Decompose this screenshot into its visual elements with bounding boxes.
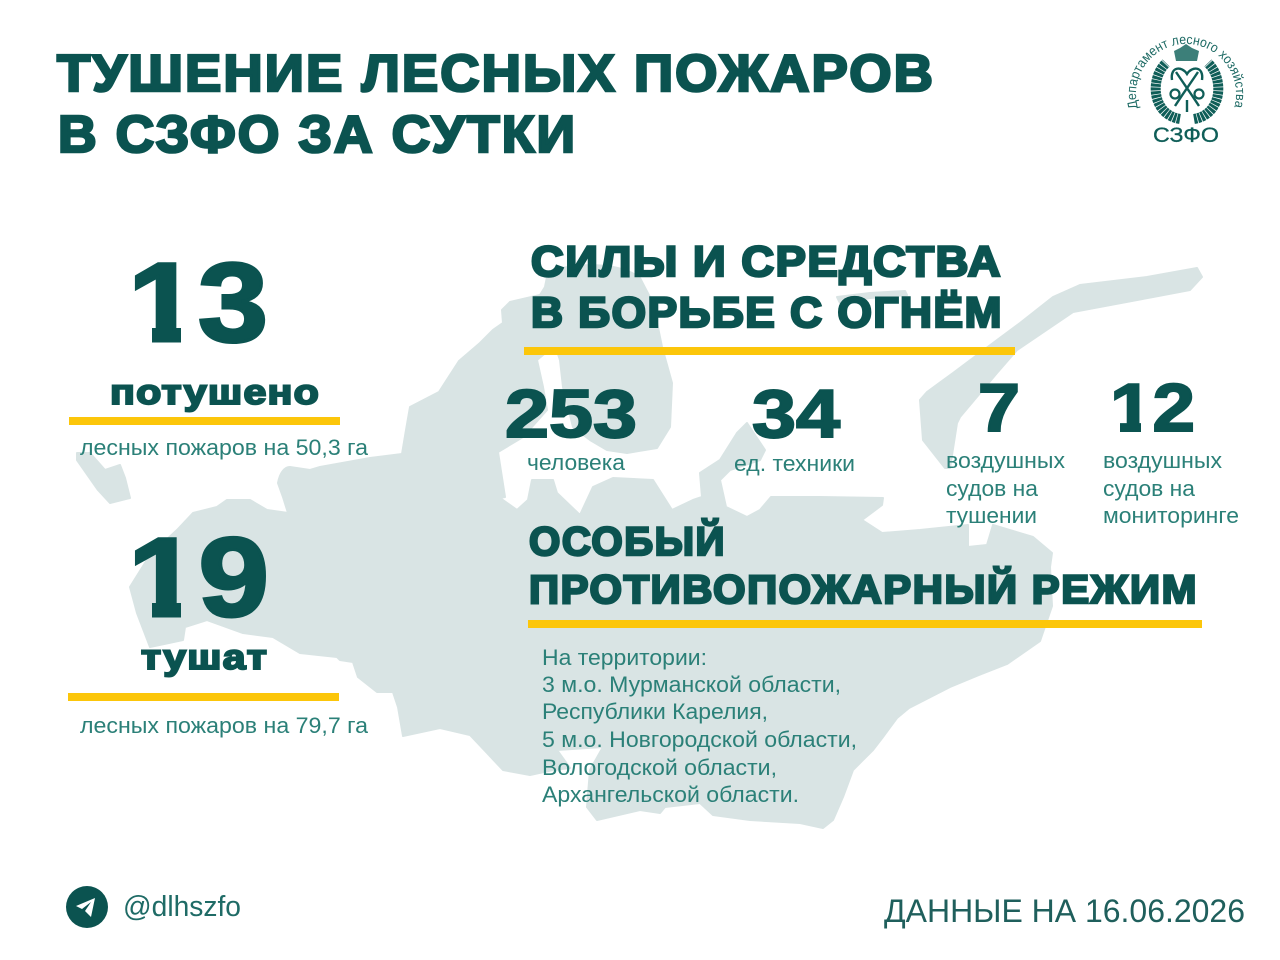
- stat: 7 aircraft firefighting: судов на: [946, 476, 1039, 501]
- stat: 253 people: 253: [505, 376, 637, 452]
- stat: 13 extinguished: 13: [128, 240, 268, 365]
- data date: ДАННЫЕ НА 16.06.2026: [884, 893, 1245, 929]
- stat: 253 people: человека: [527, 450, 626, 475]
- stat: 19 being extinguished: [68, 515, 369, 738]
- background map of the Northwestern Federal District: [77, 265, 1202, 828]
- stat: 7 aircraft firefighting: тушении: [946, 503, 1037, 528]
- logo: department of forestry: [1127, 36, 1244, 147]
- stat: 12 aircraft monitoring: [1103, 370, 1239, 528]
- stat: 7 aircraft firefighting: [946, 370, 1065, 528]
- stat: 19 being extinguished: тушат: [141, 638, 268, 677]
- icon: telegram: [66, 886, 108, 928]
- stat: 13 extinguished: потушено: [110, 373, 320, 412]
- stat: 7 aircraft firefighting: 7: [978, 370, 1020, 446]
- heading: forces and means: [524, 238, 1015, 355]
- stat: 12 aircraft monitoring: судов на: [1103, 476, 1196, 501]
- text block: territories: 3 м.о. Мурманской области,: [542, 672, 841, 697]
- telegram handle: @dlhszfo: [123, 891, 241, 923]
- title: ТУШЕНИЕ ЛЕСНЫХ ПОЖАРОВ: [57, 45, 935, 103]
- heading: special fire regime: [528, 518, 1202, 628]
- text block: territories: Архангельской области.: [542, 782, 799, 807]
- stat: 34 vehicles: ед. техники: [734, 451, 855, 476]
- stat: 19 being extinguished: лесных пожаров на 79,7 га: [80, 713, 369, 738]
- stat: 253 people: [505, 376, 637, 475]
- logo: department of forestry: СЗФО: [1153, 124, 1219, 147]
- stat: 13 extinguished: [69, 261, 368, 460]
- stat: 12 aircraft monitoring: воздушных: [1103, 448, 1222, 473]
- text block: territories: На территории:: [542, 645, 707, 670]
- text block: territories: [542, 645, 857, 807]
- heading: special fire regime: ПРОТИВОПОЖАРНЫЙ РЕЖИМ: [529, 566, 1198, 612]
- stat: 13 extinguished: лесных пожаров на 50,3 га: [80, 435, 369, 460]
- heading: forces and means: В БОРЬБЕ С ОГНЁМ: [531, 289, 1003, 337]
- stat: 7 aircraft firefighting: воздушных: [946, 448, 1065, 473]
- heading: forces and means: СИЛЫ И СРЕДСТВА: [531, 238, 1002, 286]
- title: [57, 45, 935, 164]
- stat: 12 aircraft monitoring: 12: [1110, 370, 1195, 446]
- text block: territories: Республики Карелия,: [542, 699, 768, 724]
- text block: territories: 5 м.о. Новгородской области,: [542, 727, 857, 752]
- heading: special fire regime: ОСОБЫЙ: [529, 518, 726, 564]
- stat: 34 vehicles: 34: [752, 376, 840, 452]
- stat: 12 aircraft monitoring: мониторинге: [1103, 503, 1239, 528]
- stat: 34 vehicles: [734, 376, 855, 476]
- text block: territories: Вологодской области,: [542, 755, 777, 780]
- logo: department of forestry: Департамент лесного хозяйства: [1127, 36, 1244, 108]
- title: В СЗФО ЗА СУТКИ: [58, 106, 577, 164]
- stat: 19 being extinguished: 19: [128, 515, 269, 640]
